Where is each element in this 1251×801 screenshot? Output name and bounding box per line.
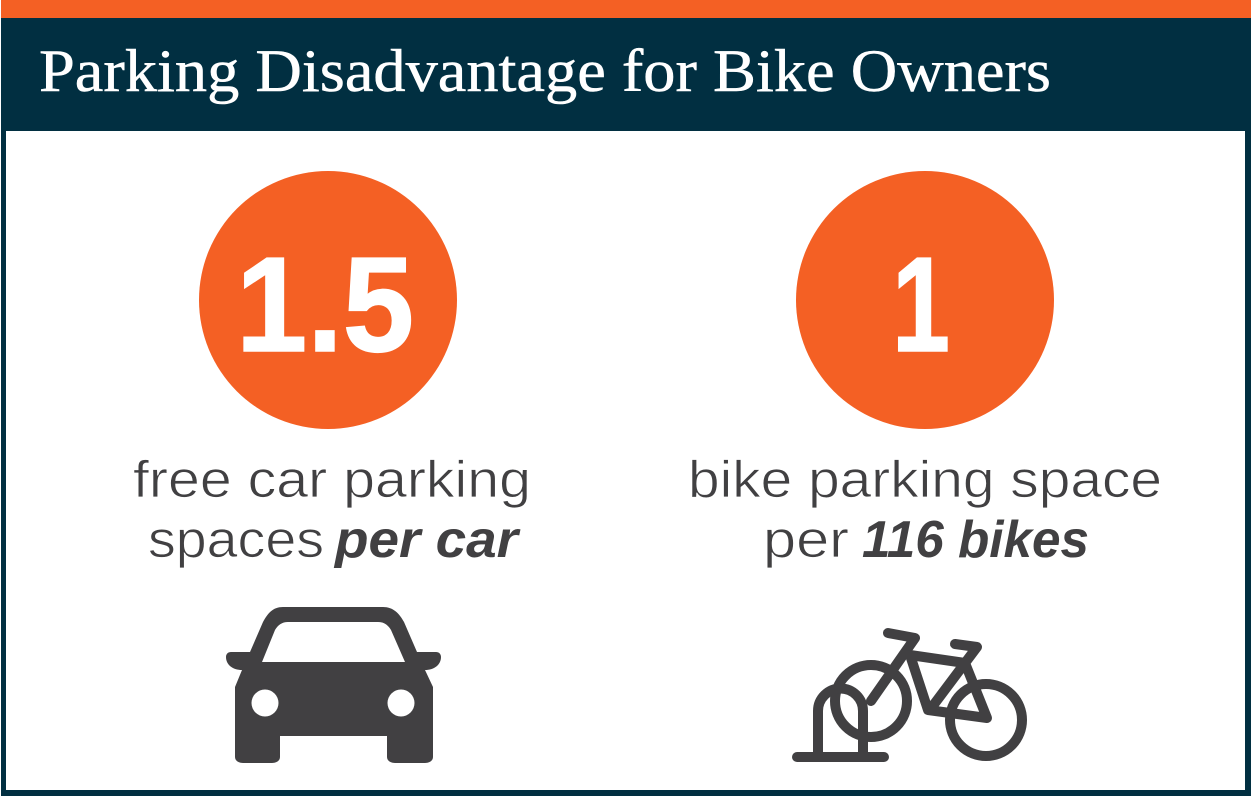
title: Parking Disadvantage for Bike Owners bbox=[39, 38, 1051, 104]
stat: bike parking circle bbox=[796, 171, 1054, 429]
text: car parking caption: spaces bbox=[148, 511, 324, 569]
stat: car parking circle bbox=[199, 171, 457, 429]
icon: bike in rack bbox=[797, 633, 1022, 757]
text: bike parking caption: bike parking space bbox=[688, 451, 1162, 509]
stat: bike parking circle: 1 bbox=[892, 229, 950, 380]
text: car parking caption bbox=[133, 451, 531, 569]
text: car parking caption: per car bbox=[333, 511, 521, 569]
text: bike parking caption bbox=[688, 451, 1162, 569]
top accent bar bbox=[1, 0, 1251, 18]
icon: car bbox=[226, 607, 441, 763]
text: car parking caption: free car parking bbox=[133, 451, 531, 509]
text: bike parking caption: 116 bikes bbox=[862, 511, 1089, 569]
stat: car parking circle: 1.5 bbox=[236, 229, 414, 380]
text: bike parking caption: per bbox=[763, 511, 849, 569]
